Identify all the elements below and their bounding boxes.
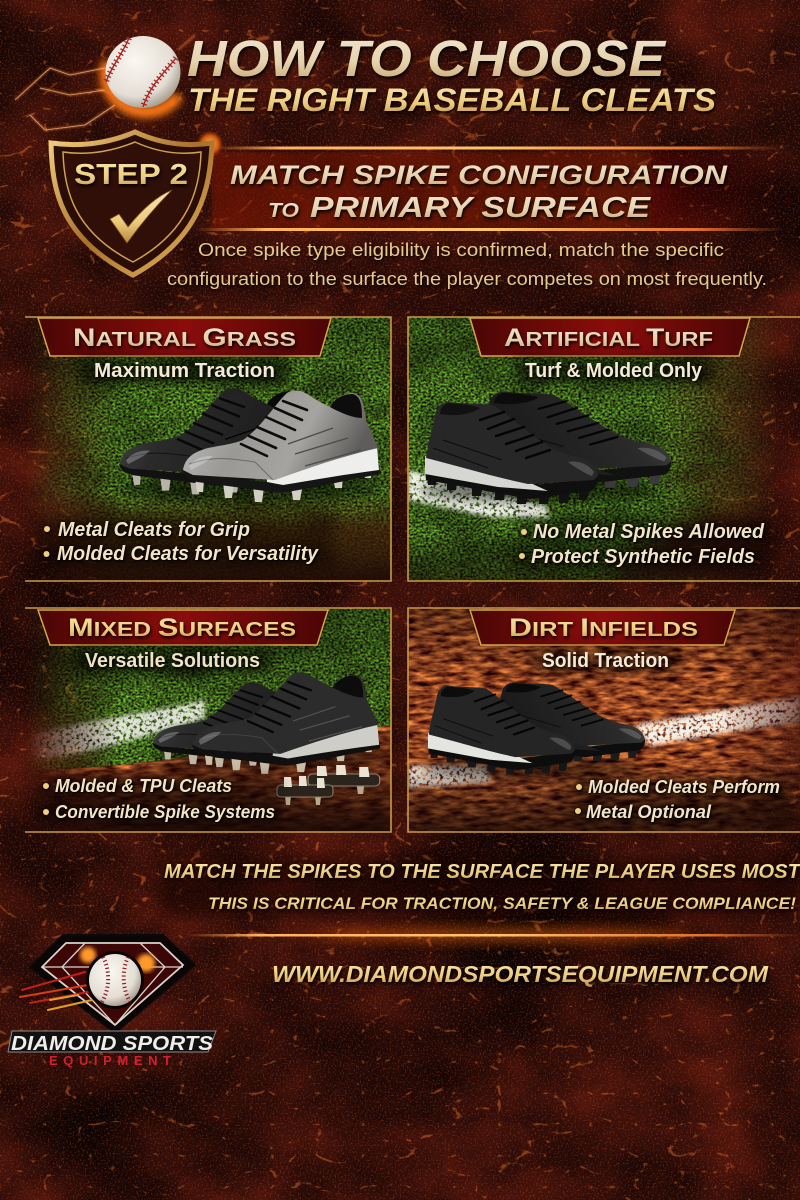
panel: natural grass [25, 317, 391, 581]
panel border [25, 608, 391, 832]
subtitle: Maximum Traction: Maximum Traction [94, 360, 275, 382]
bullet list: artificial turf [519, 521, 765, 568]
step heading: MATCH SPIKE CONFIGURATION [230, 160, 728, 190]
bullet list: dirt infields: Metal Optional [586, 801, 712, 822]
intro paragraph [167, 239, 767, 289]
panel: dirt infields [408, 608, 800, 832]
step heading: PRIMARY SURFACE [310, 192, 652, 224]
ribbon heading: Mixed Surfaces [38, 610, 328, 645]
ribbon heading: Natural Grass: NATURAL GRASS [73, 324, 296, 352]
ribbon heading: Mixed Surfaces: MIXED SURFACES [68, 614, 296, 642]
icon: convertible spike plates [277, 765, 380, 805]
bullet list: natural grass: Metal Cleats for Grip [58, 519, 250, 541]
intro paragraph: configuration to the surface the player competes on most frequently. [167, 268, 767, 289]
panel image: turf field with chalk line [408, 317, 800, 581]
icon: speed streaks [20, 972, 92, 1010]
closing message: MATCH THE SPIKES TO THE SURFACE THE PLAYER USES MOST [164, 861, 800, 883]
bullet list: mixed surfaces [43, 775, 275, 822]
panel image: grass field with shoes [25, 317, 391, 581]
subtitle: Versatile Solutions: Versatile Solutions [85, 650, 260, 672]
icon: flaming baseball [15, 35, 195, 130]
website url: WWW.DIAMONDSPORTSEQUIPMENT.COM [272, 961, 769, 987]
logo wordmark banner [8, 1031, 216, 1068]
step 2 shield badge with check mark [51, 130, 224, 275]
ribbon heading: Natural Grass [38, 318, 331, 356]
bullet list: mixed surfaces: Molded & TPU Cleats [55, 775, 232, 796]
shoe pair: black molded dirt shoes [428, 683, 645, 774]
panel border [408, 317, 800, 581]
bullet list: mixed surfaces: Convertible Spike Systems [55, 801, 275, 822]
shoe pair: black and silver metal cleats [119, 388, 380, 502]
bullet list: natural grass [44, 519, 319, 565]
closing message: THIS IS CRITICAL FOR TRACTION, SAFETY & LEAGUE COMPLIANCE! [208, 894, 796, 913]
bullet list: artificial turf: Protect Synthetic Fields [531, 546, 755, 568]
panel: mixed surfaces [25, 608, 391, 832]
panel border [408, 608, 800, 832]
ribbon heading: Artificial Turf: ARTIFICIAL TURF [504, 324, 713, 352]
step 2 shield badge with check mark: STEP 2 [74, 159, 188, 191]
step heading [230, 160, 728, 224]
shoe pair: black turf shoes [425, 392, 671, 504]
intro paragraph: Once spike type eligibility is confirmed, match the specific [198, 239, 724, 260]
title: HOW TO CHOOSE [187, 30, 667, 87]
step heading: TO [268, 200, 299, 222]
icon: check mark [110, 190, 172, 243]
bullet list: dirt infields: Molded Cleats Perform [588, 776, 780, 797]
bullet list: dirt infields [575, 776, 780, 822]
shoe pair: black molded cleats [152, 672, 380, 774]
logo wordmark banner: EQUIPMENT [49, 1053, 171, 1068]
icon: logo baseball [86, 951, 144, 1009]
title [187, 30, 716, 118]
panel: artificial turf [408, 317, 800, 581]
logo: Diamond Sports Equipment [8, 935, 216, 1068]
subtitle: Turf & Molded Only: Turf & Molded Only [525, 360, 703, 382]
panel image: grass meeting dirt with chalk line [25, 608, 391, 832]
logo wordmark banner: DIAMOND SPORTS [11, 1032, 213, 1055]
icon: diamond outline [30, 935, 195, 1033]
bullet list: natural grass: Molded Cleats for Versatility [57, 543, 319, 565]
bullet list: artificial turf: No Metal Spikes Allowed [533, 521, 765, 543]
closing message [164, 861, 800, 913]
title: THE RIGHT BASEBALL CLEATS [188, 82, 716, 118]
ribbon heading: Dirt Infields: DIRT INFIELDS [509, 614, 698, 642]
panel image: dirt with chalk lines [408, 608, 800, 832]
ribbon heading: Artificial Turf [470, 318, 750, 356]
subtitle: Solid Traction: Solid Traction [542, 650, 669, 672]
ribbon heading: Dirt Infields [470, 610, 735, 645]
panel border [25, 317, 391, 581]
